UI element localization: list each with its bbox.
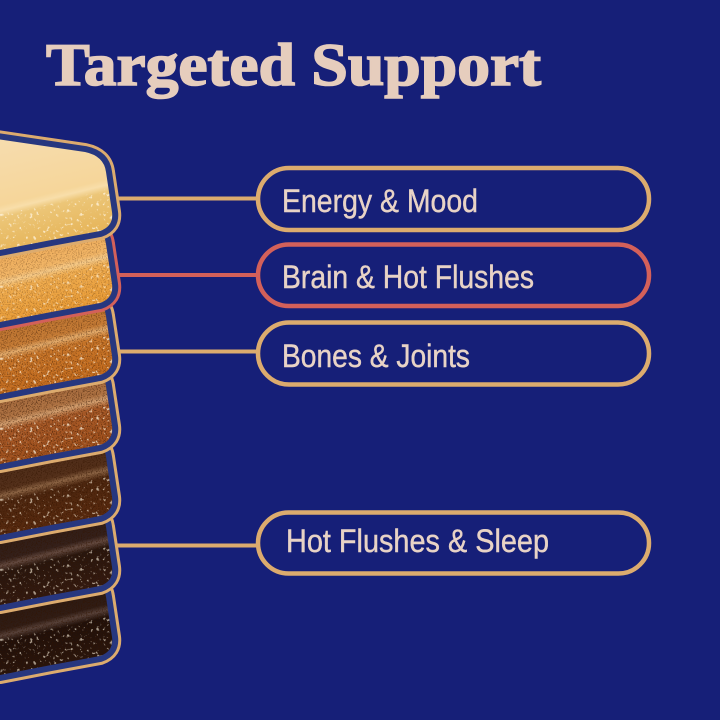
pill: Hot Flushes & Sleep: Hot Flushes & Sleep [286,523,549,559]
connector: Brain & Hot Flushes [116,273,258,277]
connector: Bones & Joints [116,350,258,354]
gummy layer 3 [0,282,115,395]
connector: Energy & Mood [116,196,258,200]
pill: Energy & Mood [258,168,649,230]
pill: Brain & Hot Flushes [258,244,649,306]
connector: Hot Flushes & Sleep [116,544,258,548]
pill: Bones & Joints: Bones & Joints [282,338,470,374]
gummy layer 7 [0,588,122,684]
gummy layer 5 [0,423,115,536]
gummy stack [0,138,115,676]
pill: Brain & Hot Flushes: Brain & Hot Flushes [282,259,534,295]
pill: Bones & Joints [258,322,649,384]
gummy layer 4 [0,378,122,473]
pill: Energy & Mood: Energy & Mood [282,183,478,219]
gummy layer 6 [0,518,122,614]
title: Targeted Support [46,32,541,98]
gummy layer 1 [0,138,115,251]
gummy layer 2 [0,210,115,323]
pill: Hot Flushes & Sleep [258,512,649,574]
